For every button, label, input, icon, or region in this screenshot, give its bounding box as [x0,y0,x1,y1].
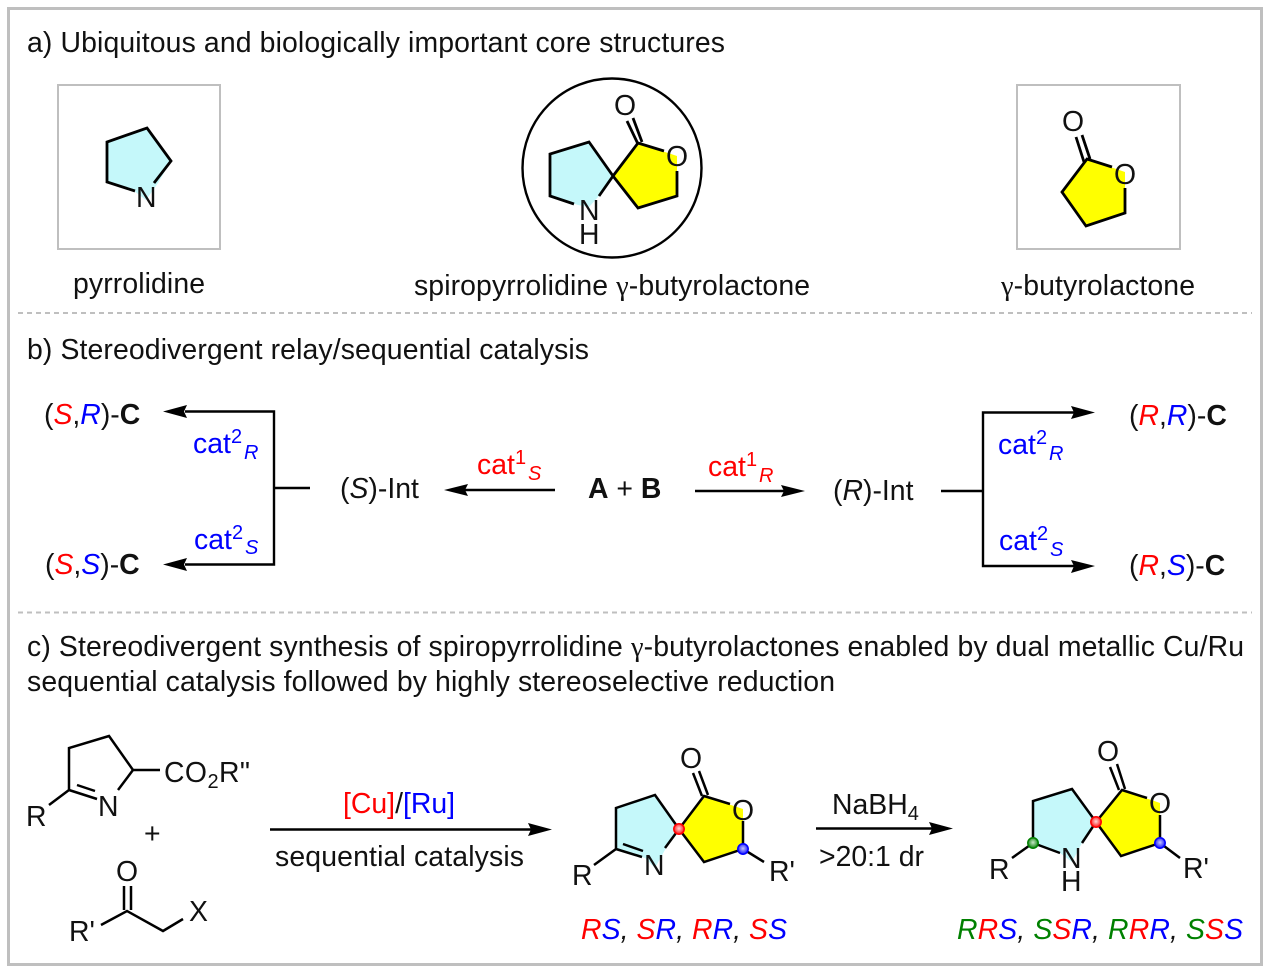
butyrolactone box [1017,85,1180,249]
cat1S: cat [477,449,515,481]
substrate pyrroline [26,736,250,833]
butyrolactone box: O [1114,159,1136,191]
intermediate product: R' [769,856,795,888]
cat2S left: S [245,537,259,559]
arrow to S-Int [444,484,555,496]
spiropyrrolidine lactone circle: H [579,219,600,251]
NaBH4 label: NaBH [832,789,908,821]
intermediate product: O [680,743,702,775]
stereoisomer list 2: RRS, SSR, RRR, SSS [957,914,1243,946]
intermediate product [572,743,795,892]
S-Int: (S)-Int [340,473,419,505]
butyrolactone label: γ-butyrolactone [1000,270,1195,302]
pyrrolidine label: pyrrolidine [73,268,205,300]
plus sign: + [144,818,161,850]
reduced product: R' [1183,853,1209,885]
sequential catalysis label: sequential catalysis [275,841,524,873]
product S,S: (S,S)-C [45,549,140,581]
intermediate product: O [732,795,754,827]
substrate pyrroline: N [98,791,119,823]
product R,S: (R,S)-C [1129,550,1225,582]
pyrrolidine box [58,85,220,249]
panel b: relay catalysis [27,334,1227,582]
reduced product: O [1149,788,1171,820]
reduced product [989,736,1209,898]
heading a: a) Ubiquitous and biologically important core structures [27,27,725,59]
substrate pyrroline: R" [219,757,250,789]
substrate pyrroline: CO [164,757,207,789]
spiropyrrolidine label: spiropyrrolidine γ-butyrolactone [414,270,810,302]
cat1S: S [528,463,542,485]
cat2R left: R [244,442,258,464]
substrate pyrroline: 2 [207,771,219,793]
substrate ketone: O [116,856,138,888]
cat2S left: 2 [232,522,243,544]
cat1S: 1 [515,447,526,469]
cat2S right: S [1050,539,1064,561]
reduced product: N [1061,843,1082,875]
cat2R right: cat [998,429,1036,461]
spiropyrrolidine lactone circle: O [614,90,636,122]
substrate ketone: X [189,896,208,928]
panel c: stereodivergent synthesis [26,631,1244,948]
substrate ketone: R' [69,916,95,948]
cat2S right: cat [999,525,1037,557]
spiropyrrolidine lactone circle: O [666,141,688,173]
cat2S right: 2 [1037,523,1048,545]
cat1R: 1 [746,449,757,471]
heading c second line: sequential catalysis followed by highly stereoselective reduction [27,666,835,698]
reduced product: O [1097,736,1119,768]
cat2S left: cat [194,524,232,556]
cat2R left: 2 [231,426,242,448]
dr label: >20:1 dr [819,841,924,873]
substrate ketone [69,856,208,948]
reduced product: H [1061,866,1082,898]
R-Int: (R)-Int [833,475,914,507]
Cu/Ru label: [Cu]/[Ru] [343,788,455,820]
product S,R: (S,R)-C [44,399,140,431]
arrow reduction [816,822,953,835]
arrow sequential catalysis [270,823,552,836]
cat1R: R [759,465,773,487]
arrow to R-Int [695,485,805,497]
intermediate product: N [644,850,665,882]
cat1R: cat [708,451,746,483]
intermediate product: R [572,860,593,892]
right branch arrows [941,406,1095,573]
substrate pyrroline: R [26,801,47,833]
reduced product: R [989,854,1010,886]
cat2R right: R [1049,443,1063,465]
butyrolactone box: O [1062,106,1084,138]
left branch arrows [163,405,310,571]
cat2R right: 2 [1036,427,1047,449]
spiropyrrolidine lactone circle: N [579,195,600,227]
heading c: c) Stereodivergent synthesis of spiropyrrolidine γ-butyrolactones enabled by dual metallic Cu/Ru [27,631,1244,663]
stereoisomer list 1: RS, SR, RR, SS [581,914,787,946]
panel a: core structures [27,27,1195,302]
A + B: A + B [588,473,661,505]
product R,R: (R,R)-C [1129,400,1227,432]
pyrrolidine box: N [136,182,157,214]
cat2R left: cat [193,428,231,460]
heading b: b) Stereodivergent relay/sequential catalysis [27,334,589,366]
NaBH4 label: 4 [908,803,919,825]
spiropyrrolidine lactone circle [522,78,702,258]
